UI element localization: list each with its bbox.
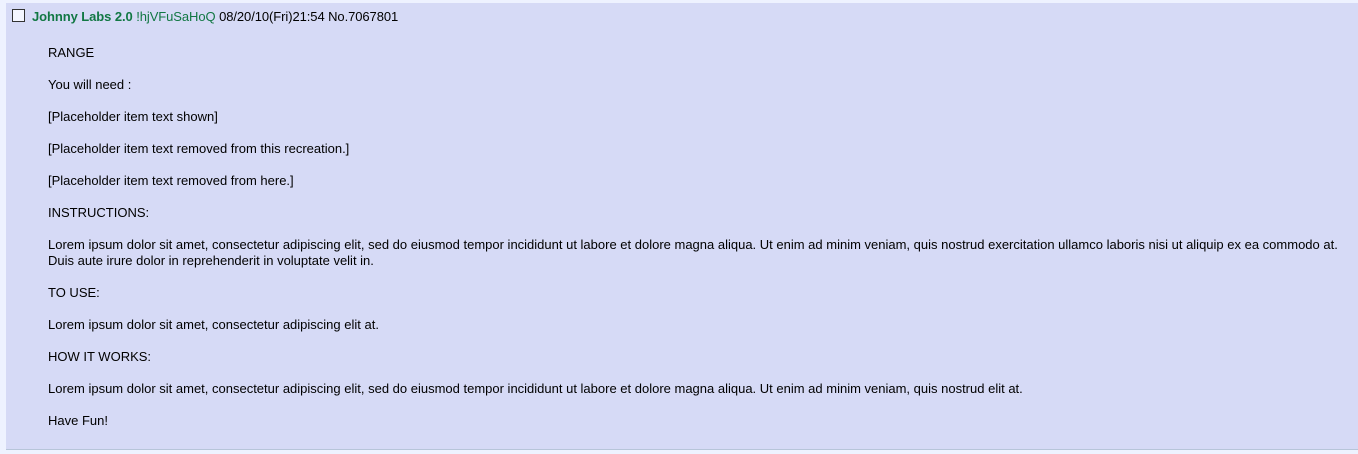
text: placeholder item one: [Placeholder item text shown] [48, 109, 218, 124]
text: placeholder paragraph [48, 237, 1338, 268]
text: placeholder paragraph: Duis aute irure dolor in reprehenderit in voluptate velit in. [48, 253, 374, 268]
post header: Johnny Labs 2.0 !hjVFuSaHoQ 08/20/10(Fri)21:54 No.7067801 [32, 9, 398, 24]
icon: post checkbox [12, 9, 25, 22]
text: placeholder item two: [Placeholder item text removed from this recreation.] [48, 141, 349, 156]
text: post title: RANGE [48, 45, 94, 60]
text: instructions heading: INSTRUCTIONS: [48, 205, 149, 220]
text: placeholder paragraph: Lorem ipsum dolor sit amet, consectetur adipiscing elit, sed do eiusmod tempor incididunt ut labore et dolore magna aliqua. Ut enim ad minim veniam, quis nostrud exercitation ullamco laboris nisi ut aliquip ex ea commodo at. [48, 237, 1338, 252]
text: sign-off: Have Fun! [48, 413, 108, 428]
text: placeholder item three: [Placeholder item text removed from here.] [48, 173, 294, 188]
text: placeholder explanation line: Lorem ipsum dolor sit amet, consectetur adipiscing elit, sed do eiusmod tempor incididunt ut labore et dolore magna aliqua. Ut enim ad minim veniam, quis nostrud elit at. [48, 381, 1023, 396]
text: placeholder usage line: Lorem ipsum dolor sit amet, consectetur adipiscing elit at. [48, 317, 379, 332]
text: explanation heading: HOW IT WORKS: [48, 349, 151, 364]
text: usage heading: TO USE: [48, 285, 100, 300]
text: list heading: You will need : [48, 77, 131, 92]
